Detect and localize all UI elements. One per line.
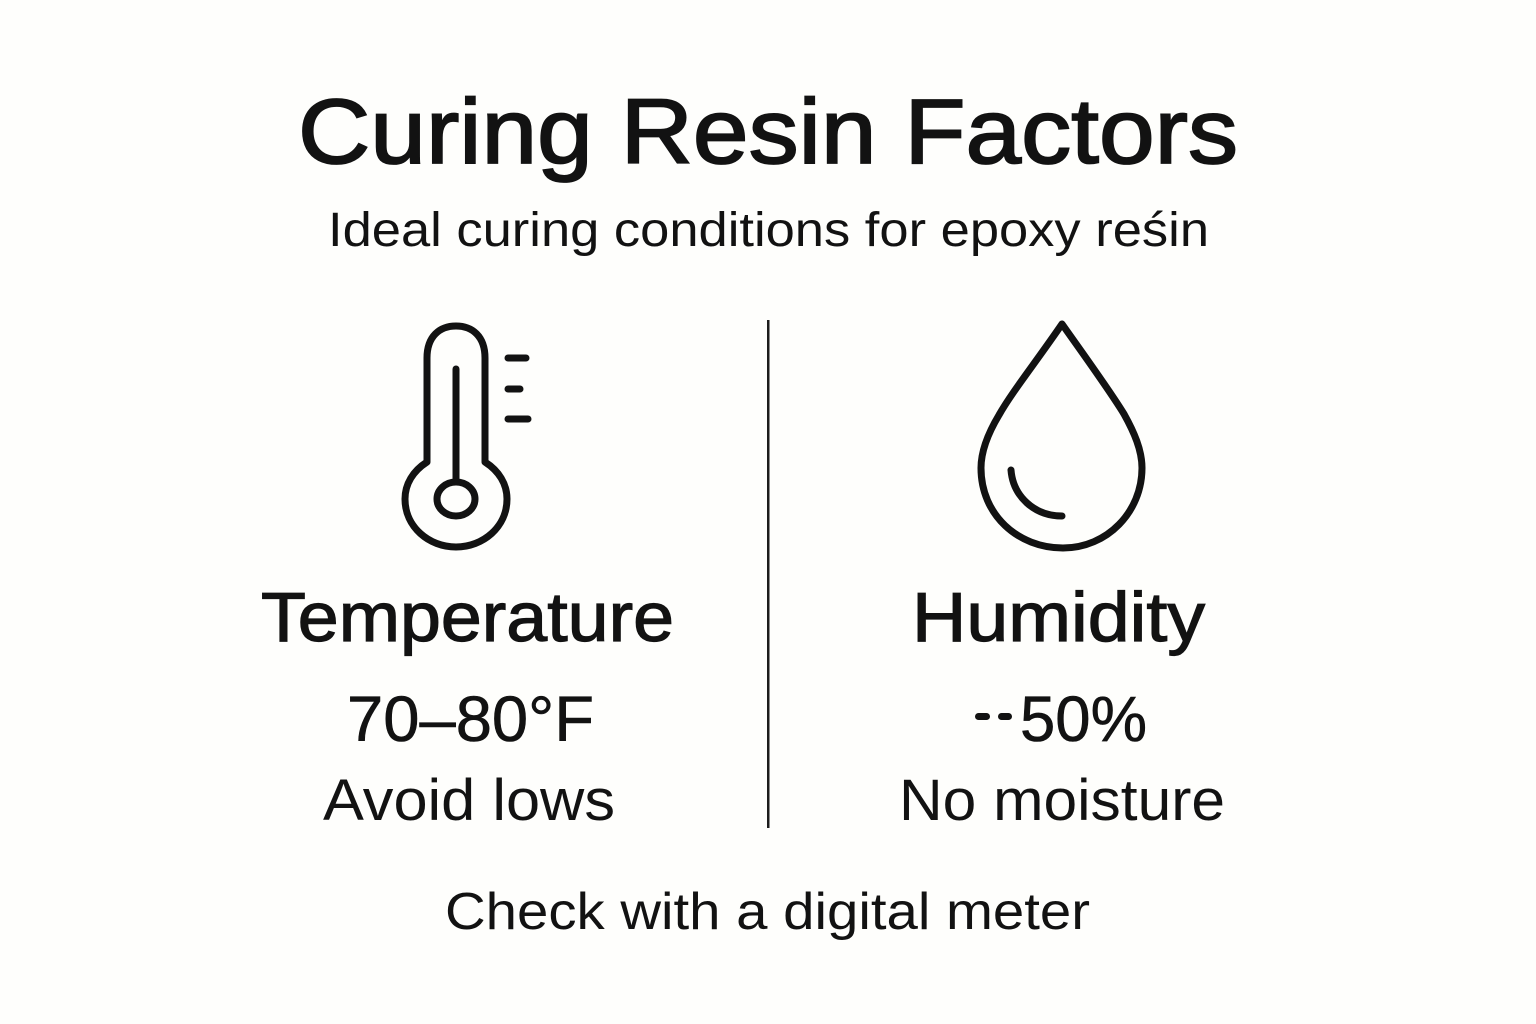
subtitle: Ideal curing conditions for epoxy reśin bbox=[328, 204, 1209, 257]
footer note: Check with a digital meter bbox=[445, 883, 1090, 941]
value: temperature range: 70–80°F bbox=[347, 683, 594, 755]
note: no moisture: No moisture bbox=[899, 768, 1225, 833]
value: humidity level: 50% bbox=[1020, 683, 1147, 755]
icon: thermometer bbox=[405, 326, 528, 547]
panel: humidity bbox=[899, 324, 1225, 833]
divider bbox=[767, 320, 770, 828]
heading: temperature: Temperature bbox=[261, 578, 674, 656]
note: avoid lows: Avoid lows bbox=[323, 768, 615, 833]
panel: temperature bbox=[261, 326, 674, 833]
icon: water drop bbox=[981, 324, 1142, 548]
heading: humidity: Humidity bbox=[912, 578, 1205, 656]
title: Curing Resin Factors bbox=[298, 81, 1238, 183]
